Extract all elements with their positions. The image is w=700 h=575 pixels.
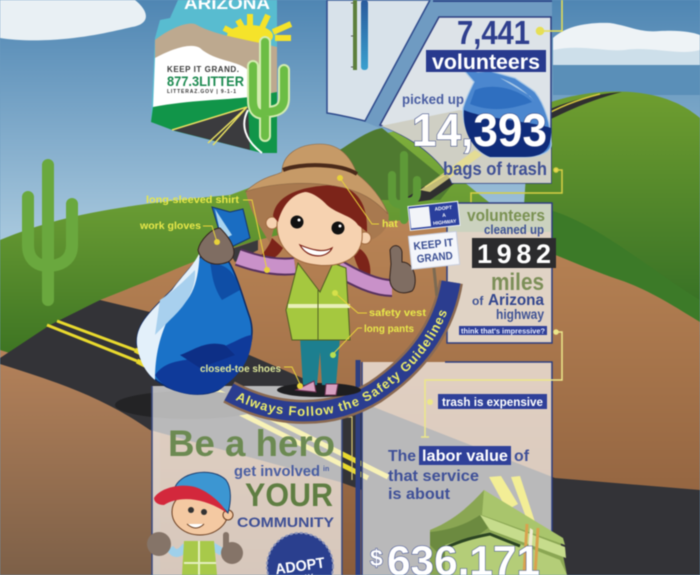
text: get involved in: in xyxy=(323,466,329,473)
stat: 14,393: 14,393 xyxy=(412,104,547,156)
ears xyxy=(266,217,371,244)
trash bag icon xyxy=(462,68,551,157)
text: the labor value: of xyxy=(514,448,530,465)
illustration: trash bag carried xyxy=(137,207,258,394)
text: the labor value: that service xyxy=(388,468,479,485)
stat: $636,171: $ xyxy=(370,545,383,571)
logo text: LITTERAZ.GOV | 9-1-1 xyxy=(167,89,236,95)
sign: keep it grand xyxy=(408,231,463,298)
heading: Be a hero: Be a hero xyxy=(168,423,335,464)
safety vest xyxy=(286,263,350,340)
stat: 7,441 volunteers: volunteers xyxy=(432,51,540,74)
shoe shadow xyxy=(277,383,361,397)
panel: volunteers and bags xyxy=(380,14,551,192)
brown ground right xyxy=(100,220,700,575)
text: the labor value: is about xyxy=(388,486,451,503)
hair front xyxy=(273,185,367,232)
thermometer scale xyxy=(351,0,368,70)
text: miles of Arizona highway: of xyxy=(472,294,484,308)
banner: always follow the safety guidelines xyxy=(223,280,464,424)
panel: trash is expensive xyxy=(358,330,567,575)
hair braids xyxy=(256,238,370,281)
sign: adopt a highway xyxy=(408,201,460,230)
label: long pants: long pants xyxy=(364,323,414,335)
illustration: boy in cap xyxy=(147,472,243,575)
label: closed-toe shoes xyxy=(200,363,303,389)
label: closed-toe shoes: closed-toe shoes xyxy=(200,363,281,375)
banner: always follow the safety guidelines: Always Follow the Safety Guidelines xyxy=(235,310,448,417)
far road top right xyxy=(395,92,622,205)
logo text: KEEP IT GRAND. xyxy=(167,65,239,74)
horizon band xyxy=(553,65,700,95)
glove right xyxy=(390,246,415,293)
label: work gloves xyxy=(139,220,220,245)
sign: keep it grand: KEEP IT xyxy=(413,237,454,253)
text: the labor value: labor value xyxy=(422,448,508,465)
hat back brim xyxy=(246,176,389,243)
icon: money stack xyxy=(430,476,567,575)
text: miles of Arizona highway: miles xyxy=(491,269,544,296)
Arizona Keep It Grand logo xyxy=(151,0,291,153)
eyes xyxy=(290,216,344,234)
connector to miles panel xyxy=(471,168,562,208)
logo text xyxy=(167,65,244,95)
text: miles of Arizona highway xyxy=(472,269,544,322)
callout labels for safety gear xyxy=(139,175,427,389)
background cactus middle xyxy=(392,155,417,220)
panel: be a hero xyxy=(147,386,352,575)
diagonal band xyxy=(365,0,552,128)
label: hat: hat xyxy=(382,218,398,230)
cloud left xyxy=(0,0,146,40)
panel: thermometer xyxy=(327,0,430,121)
text: miles of Arizona highway: Arizona xyxy=(488,292,544,309)
heading: YOUR: YOUR xyxy=(245,477,333,513)
panel: miles cleaned xyxy=(447,203,556,343)
text: volunteers cleaned up: volunteers xyxy=(467,206,545,225)
callout: think that's impressive?: think that's impressive? xyxy=(461,326,545,336)
text: the labor value: The xyxy=(388,448,416,465)
cloud right xyxy=(553,23,700,65)
text: get involved in: get involved xyxy=(234,463,320,480)
text: the labor value xyxy=(388,446,530,503)
sign: adopt a highway: A xyxy=(442,213,447,219)
stat: 1982 miles counter: 1982 xyxy=(477,239,551,269)
text: miles of Arizona highway: highway xyxy=(496,306,544,322)
text: picked up: picked up xyxy=(402,91,464,107)
sign: adopt a highway: ADOPT xyxy=(434,205,452,213)
text: volunteers cleaned up xyxy=(467,206,545,237)
brown ground lower left xyxy=(0,350,160,575)
far dark hill xyxy=(340,128,452,200)
shoes xyxy=(296,381,338,395)
main road xyxy=(0,300,700,575)
sign: keep it grand: GRAND xyxy=(416,250,453,266)
badge: adopt a highway xyxy=(267,533,333,575)
label: hat xyxy=(337,175,398,230)
background cactus left xyxy=(28,165,72,300)
glove left xyxy=(198,228,234,264)
text: bags of trash: bags of trash xyxy=(443,159,547,179)
label: long pants xyxy=(330,323,414,358)
shadow under bag xyxy=(115,391,265,419)
logo cactus xyxy=(253,42,284,136)
pants xyxy=(300,337,340,385)
illustration: girl volunteer xyxy=(198,144,415,395)
connector to labor value xyxy=(421,330,562,437)
connector top xyxy=(536,0,562,34)
stat: 7,441 volunteers xyxy=(426,14,546,74)
hill left xyxy=(0,130,560,360)
label: trash is expensive: trash is expensive xyxy=(442,395,543,409)
text: volunteers cleaned up: cleaned up xyxy=(484,222,544,237)
darker hill fold xyxy=(540,210,700,345)
label: work gloves: work gloves xyxy=(139,220,201,232)
logo text: 877.3LITTER xyxy=(167,73,244,89)
sun xyxy=(224,14,291,47)
label: safety vest: safety vest xyxy=(369,307,427,319)
label: long-sleeved shirt xyxy=(146,194,270,273)
hill right xyxy=(520,91,700,340)
arm shirt sleeves xyxy=(238,257,392,288)
smile xyxy=(300,245,332,256)
label: long-sleeved shirt: long-sleeved shirt xyxy=(146,194,240,206)
label: safety vest xyxy=(332,290,427,319)
text: COMMUNITY: COMMUNITY xyxy=(237,514,335,530)
stat: 7,441 volunteers: 7,441 xyxy=(457,14,530,51)
face xyxy=(277,190,362,265)
hat crown and brim xyxy=(245,144,388,214)
sign: adopt a highway: HIGHWAY xyxy=(433,219,457,227)
